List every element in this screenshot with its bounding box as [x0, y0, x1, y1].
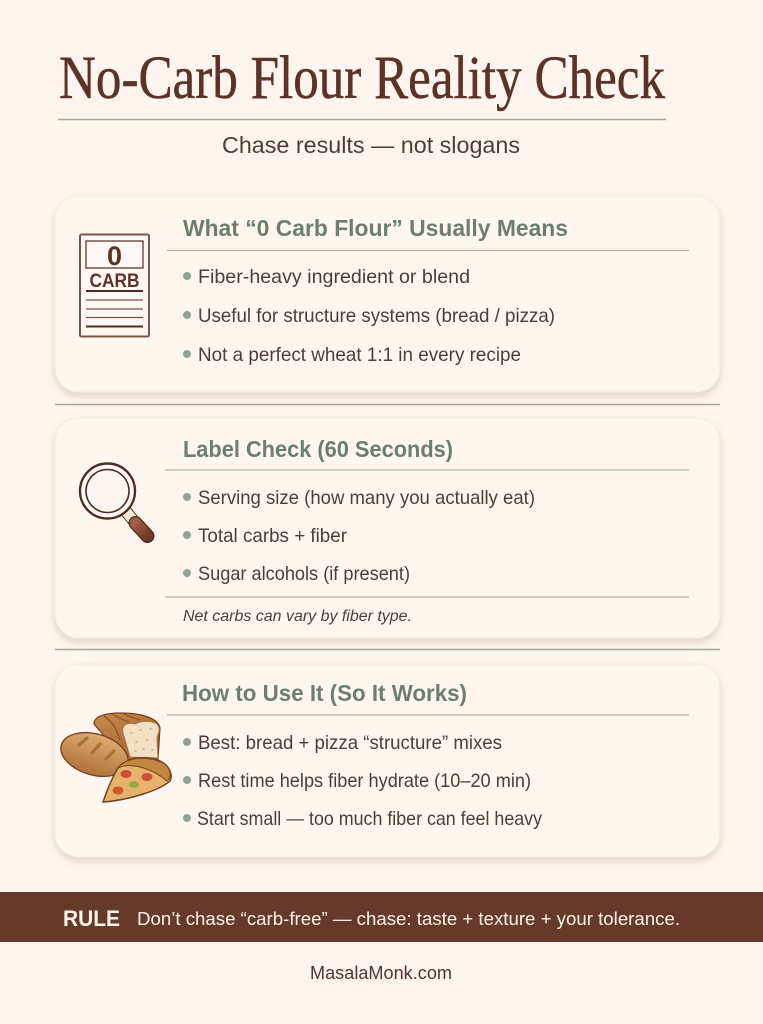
- bullet list: [183, 732, 542, 830]
- bullet list: [183, 487, 535, 585]
- heading: How to Use It (So It Works): [182, 680, 467, 706]
- rule banner: [0, 892, 763, 942]
- note: Net carbs can vary by fiber type.: [183, 608, 412, 625]
- bullet list: [183, 266, 555, 366]
- icon: magnifying glass: [80, 464, 148, 536]
- icon: bread and pizza: [56, 713, 171, 802]
- pizza slice: [103, 758, 171, 802]
- panel: label check: [55, 418, 720, 638]
- panel: how to use it: [55, 664, 720, 857]
- bullet list: Start small — too much fiber can feel heavy: [197, 808, 542, 830]
- bullet list: Rest time helps fiber hydrate (10–20 min): [198, 770, 531, 792]
- bullet list: Fiber-heavy ingredient or blend: [198, 266, 470, 288]
- icon: nutrition label: [80, 234, 149, 336]
- panel: what 0 carb flour means: [55, 196, 720, 392]
- loaf: [94, 713, 160, 760]
- rule banner: Don’t chase “carb-free” — chase: taste + texture + your tolerance.: [137, 908, 680, 929]
- round bread: [56, 725, 133, 784]
- bullet list: Useful for structure systems (bread / pizza): [198, 305, 555, 327]
- bullet list: Best: bread + pizza “structure” mixes: [198, 732, 502, 754]
- title: No-Carb Flour Reality Check: [59, 45, 665, 112]
- bullet list: Serving size (how many you actually eat): [198, 487, 535, 509]
- icon: nutrition label: CARB: [90, 271, 140, 292]
- heading: Label Check (60 Seconds): [183, 436, 453, 462]
- footer: MasalaMonk.com: [310, 963, 452, 983]
- bullet list: Not a perfect wheat 1:1 in every recipe: [198, 344, 521, 366]
- bullet list: Sugar alcohols (if present): [198, 563, 410, 585]
- icon: nutrition label: 0: [107, 241, 122, 271]
- heading: What “0 Carb Flour” Usually Means: [183, 215, 568, 241]
- rule banner: RULE: [63, 906, 120, 931]
- bullet list: Total carbs + fiber: [198, 525, 347, 547]
- subtitle: Chase results — not slogans: [222, 132, 520, 158]
